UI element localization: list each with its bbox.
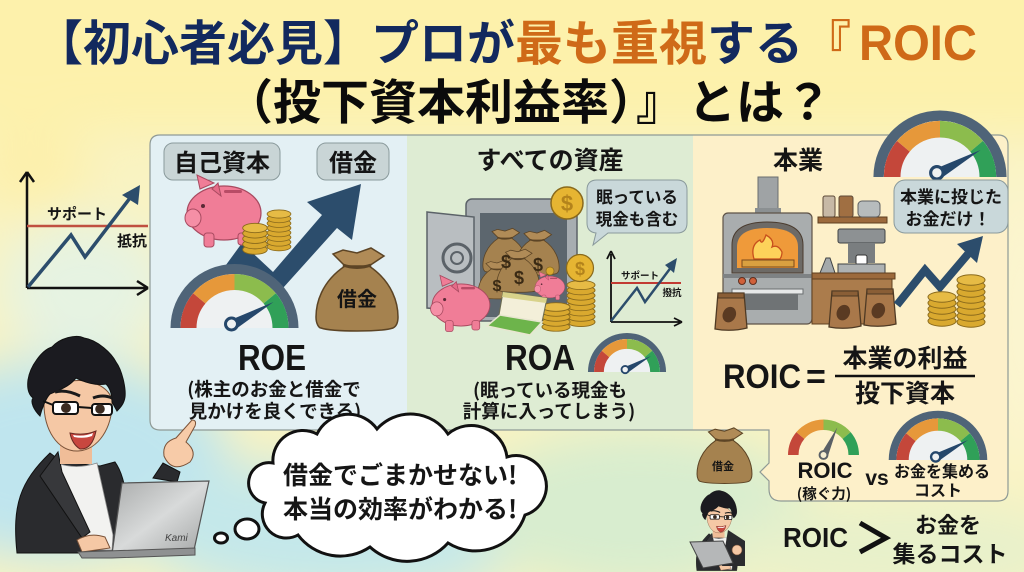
ROA gauge	[588, 333, 666, 373]
title: とは	[688, 63, 784, 133]
label: debt	[317, 143, 389, 180]
conclusion	[783, 508, 1008, 569]
ROE heading: ROE	[238, 337, 306, 378]
icon: coffee bags	[715, 289, 896, 330]
icon: debt bag: 借金	[337, 283, 377, 312]
label: debt: 借金	[329, 143, 377, 178]
arrow rising	[897, 236, 983, 305]
icon: money bags: $	[493, 278, 502, 295]
support and resistance chart	[20, 172, 148, 295]
mini support chart	[607, 251, 682, 326]
ROE note: 見かけを良くできる)	[189, 398, 361, 424]
speech bubble: 本当の効率がわかる!	[283, 490, 517, 526]
icon: money bags: $	[501, 252, 511, 272]
title	[35, 4, 977, 133]
presenter with laptop	[16, 336, 209, 558]
panel: ROE	[164, 143, 398, 424]
icon: large coin: $	[561, 191, 573, 216]
title: （投下資本利益率）	[225, 63, 657, 133]
icon: small pig	[534, 267, 565, 301]
callout: idle cash included: 眠っている	[596, 184, 678, 208]
ROA heading: ROA	[505, 337, 575, 378]
title: 【初心者必見】プロが最も重視する『	[35, 4, 851, 74]
icon: bank book	[487, 292, 547, 335]
icon: coin stacks: $	[575, 259, 585, 279]
ROIC formula: =	[806, 358, 826, 396]
speech bubble: 借金でごまかせない!	[283, 456, 517, 492]
panel: ROIC	[715, 110, 1008, 504]
icon: coin stacks	[243, 210, 291, 254]
icon: money bags: $	[533, 255, 543, 275]
ROA note	[463, 377, 635, 424]
callout: idle cash included	[587, 180, 687, 245]
panel backgrounds	[150, 135, 1008, 501]
title: 』	[636, 63, 684, 133]
icon: money bags	[478, 228, 559, 299]
callout: idle cash included: 現金も含む	[596, 206, 678, 230]
conclusion: お金を	[915, 508, 981, 540]
cost label	[894, 458, 990, 501]
heading: all assets: すべての資産	[476, 141, 624, 177]
icon: small debt bag: 借金	[712, 458, 734, 474]
mini support chart: 撥抗	[662, 285, 682, 299]
arrow rising	[215, 184, 361, 300]
icon: shelf with jars	[818, 196, 887, 223]
heading: core business: 本業	[773, 141, 823, 177]
icon: piggy bank	[185, 175, 261, 247]
cost gauge	[889, 411, 987, 462]
top gauge	[873, 110, 1007, 179]
icon: debt bag	[316, 248, 398, 331]
icon: pizza oven	[723, 177, 812, 324]
versus: vs	[865, 467, 889, 490]
icon: large coin	[551, 187, 583, 219]
ROE note	[187, 376, 361, 424]
ROIC formula: 本業の利益	[842, 339, 968, 375]
ROIC formula: ROIC	[723, 358, 801, 396]
support and resistance chart: サポート	[47, 203, 107, 224]
ROA note: (眠っている現金も	[473, 377, 627, 403]
ROIC gauge	[793, 425, 854, 459]
mini support chart: サポート	[621, 268, 659, 282]
ROIC label	[797, 458, 853, 504]
title: ？	[784, 63, 832, 133]
icon: coin stacks	[542, 254, 595, 331]
ROA note: 計算に入ってしまう)	[463, 398, 635, 424]
callout: only invested money: 本業に投じた	[900, 183, 1002, 208]
pointing hand	[153, 420, 196, 482]
icon: small debt bag	[697, 428, 752, 483]
icon: money bags: $	[514, 268, 524, 288]
ROIC label: (稼ぐ力)	[797, 483, 851, 504]
callout: only invested money: お金だけ！	[906, 205, 990, 230]
ROIC formula: 投下資本	[855, 374, 955, 410]
callout: only invested money	[894, 180, 1008, 233]
cost label: お金を集める	[894, 458, 990, 482]
ROE note: (株主のお金と借金で	[187, 376, 361, 402]
laptop	[78, 481, 209, 558]
laptop: Kami	[165, 533, 189, 544]
icon: coin stacks	[928, 275, 985, 327]
small presenter	[690, 490, 745, 571]
ROIC label: ROIC	[798, 458, 853, 483]
conclusion: 集るコスト	[892, 535, 1008, 569]
icon: espresso machine	[820, 229, 885, 273]
speech bubble	[214, 414, 546, 561]
panel: ROA	[427, 141, 687, 424]
ROIC formula	[723, 339, 975, 410]
cost label: コスト	[914, 477, 962, 501]
support and resistance chart: 抵抗	[117, 230, 147, 251]
gauge	[170, 264, 298, 330]
title: ROIC	[859, 15, 977, 71]
icon: open safe	[427, 199, 577, 321]
icon: big pig	[431, 275, 490, 332]
label: equity: 自己資本	[174, 143, 270, 178]
icon: counter	[812, 273, 895, 324]
conclusion: ROIC	[783, 522, 848, 553]
